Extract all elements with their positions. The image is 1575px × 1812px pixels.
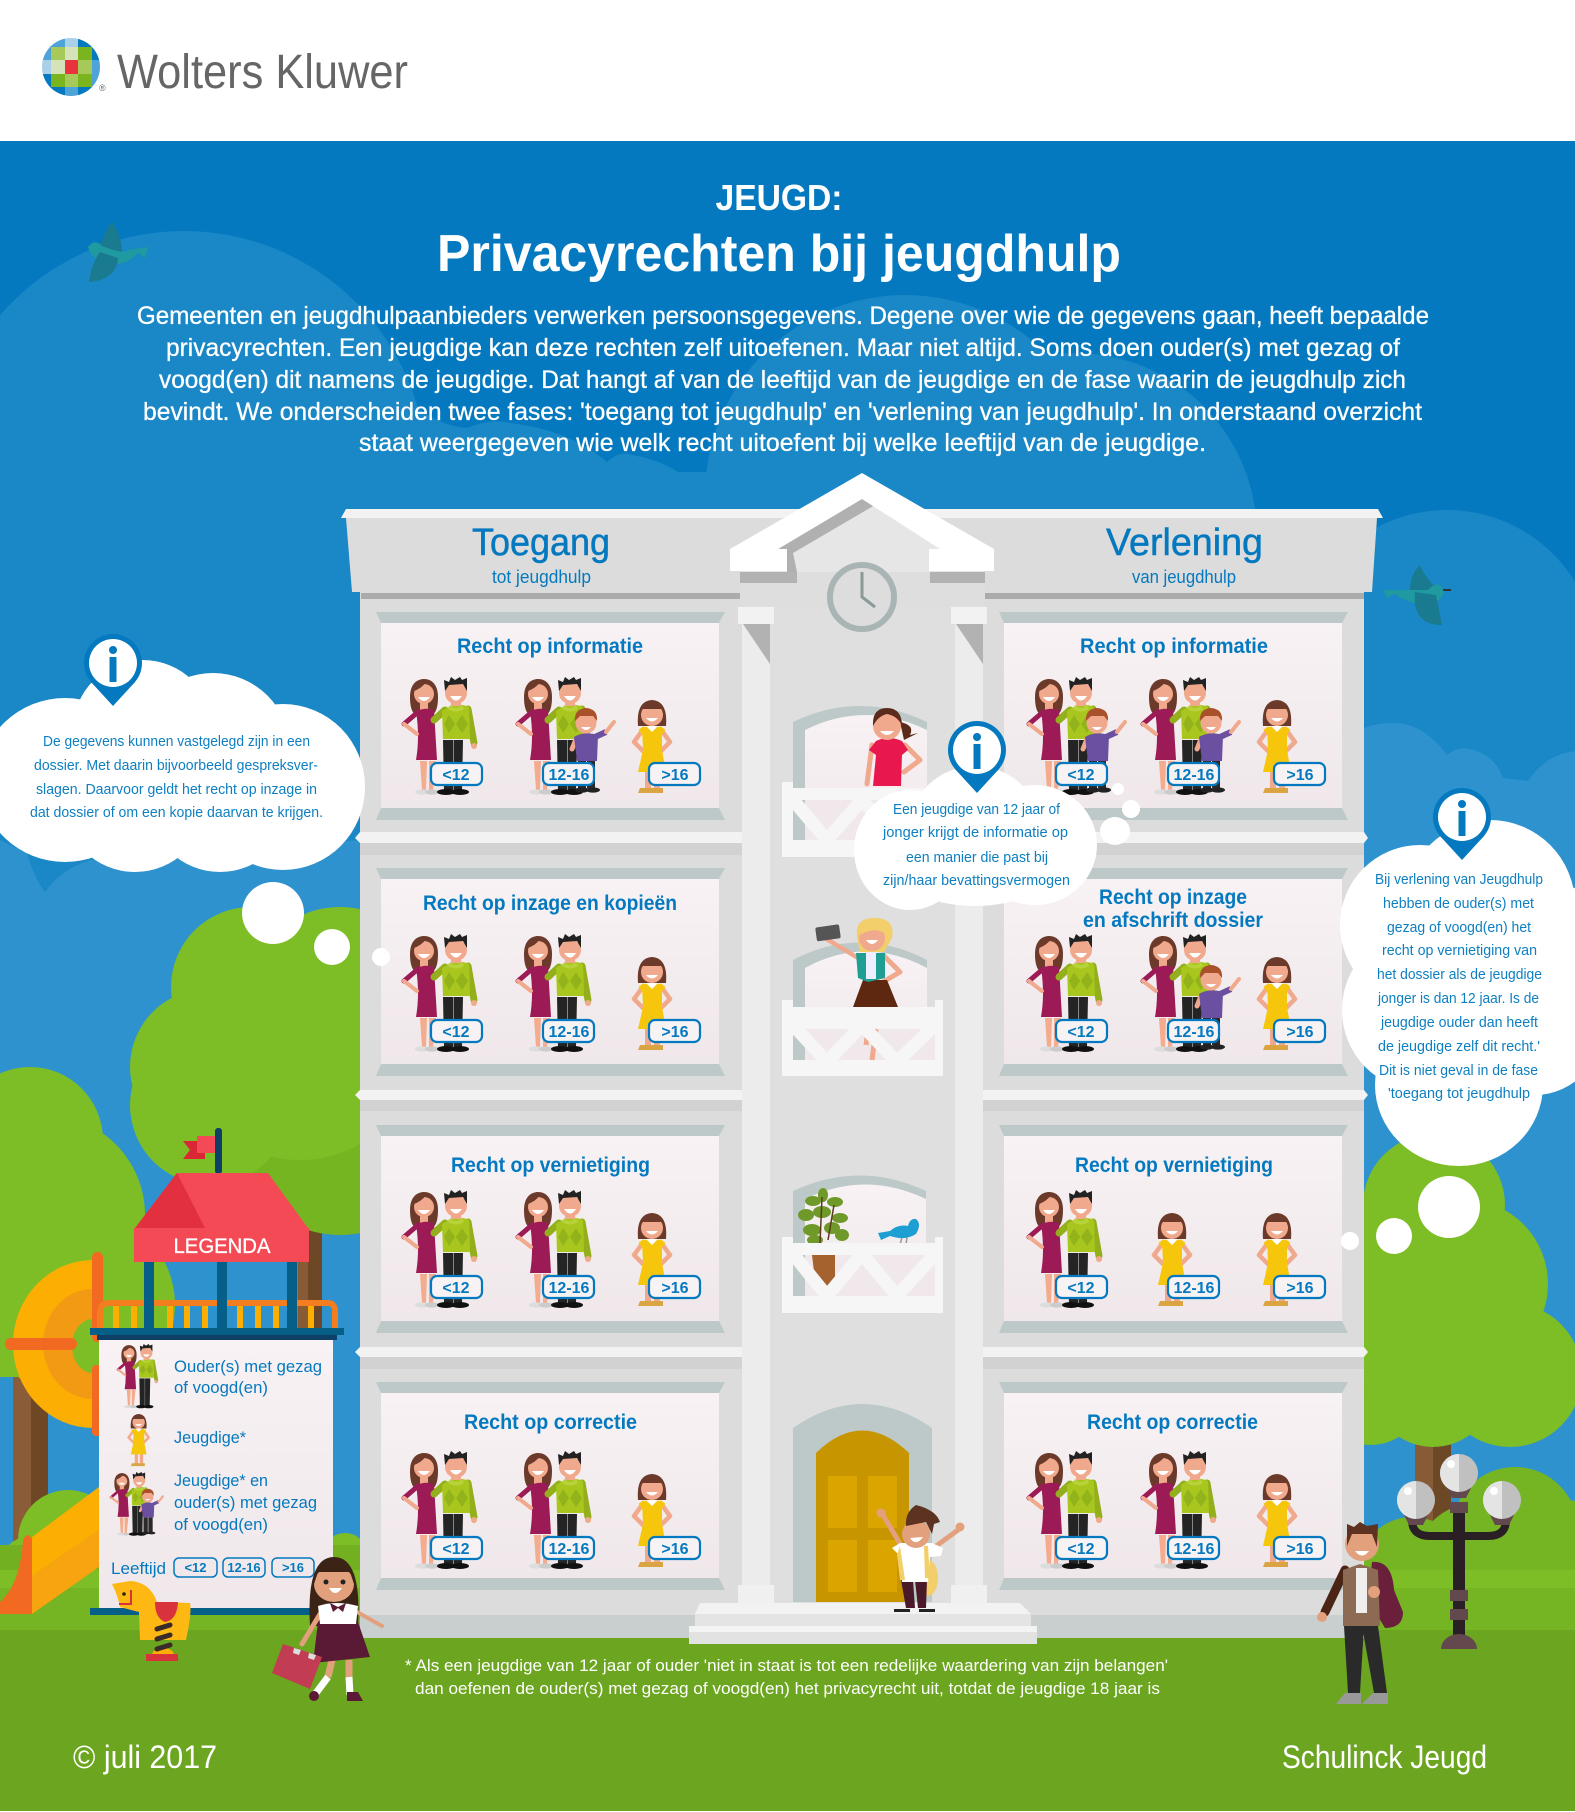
callout: verlening: Bij verlening van Jeugdhulp [1375,871,1543,888]
callout: dossier: dat dossier of om een kopie daarvan te krijgen. [30,804,323,821]
panel: Toegang, recht op correctie: >16 [661,1541,689,1558]
logo: Wolters Kluwer: Wolters Kluwer [117,46,408,99]
intro text: staat weergegeven wie welk recht uitoefent bij welke leeftijd van de jeugdige. [359,429,1206,457]
legend board [90,1335,337,1615]
callout: verlening: Dit is niet geval in de fase [1379,1062,1538,1079]
intro text: Gemeenten en jeugdhulpaanbieders verwerken persoonsgegevens. Degene over wie de gegevens gaan, heeft bepaalde [137,302,1429,330]
panel: Toegang, recht op vernietiging: >16 [661,1280,689,1297]
panel: Toegang, recht op informatie: <12 [442,767,470,784]
callout: verlening: hebben de ouder(s) met [1383,895,1535,912]
panel: Verlening, recht op informatie: >16 [1286,767,1314,784]
legend flag [183,1128,222,1174]
pavilion roof [134,1173,309,1262]
panel: Verlening, recht op vernietiging: Recht op vernietiging [1075,1154,1273,1177]
callout: verlening [1340,788,1575,1254]
footer: date: © juli 2017 [73,1739,217,1775]
panel: Toegang, recht op vernietiging: <12 [442,1280,470,1297]
rocking horse [112,1581,190,1661]
panel: Toegang, recht op vernietiging: Recht op vernietiging [451,1154,650,1177]
intro text: privacyrechten. Een jeugdige kan deze rechten zelf uitoefenen. Maar niet altijd. Soms doen ouder(s) met gezag of [166,334,1400,362]
panel: Verlening, recht op correctie: Recht op correctie [1087,1411,1258,1434]
heading: Verlening: van jeugdhulp [1132,567,1236,587]
legend item: age badges: <12 [184,1560,207,1575]
panel: Toegang, recht op correctie: <12 [442,1541,470,1558]
legend item: youth: Jeugdige* [174,1428,246,1447]
panel: Toegang, recht op correctie: Recht op correctie [464,1411,637,1434]
footer: brand: Schulinck Jeugd [1282,1739,1487,1775]
balcony 2 with selfie woman [782,918,943,1076]
panel: Toegang, recht op informatie [376,612,725,820]
logo: Wolters Kluwer: ® [99,83,106,93]
title: JEUGD: [716,177,842,218]
panel: Verlening, recht op informatie: 12-16 [1174,767,1215,784]
legend item: youth and parents: of voogd(en) [174,1515,268,1534]
panel: Verlening, recht op inzage en afschrift dossier: en afschrift dossier [1083,909,1263,932]
panel: Toegang, recht op correctie [376,1382,725,1590]
callout: verlening: 'toegang tot jeugdhulp [1388,1085,1530,1102]
callout: informatie onder 12 jaar: zijn/haar bevattingsvermogen [883,872,1070,889]
heading: Verlening [1106,522,1263,587]
panel: Verlening, recht op correctie: <12 [1067,1541,1095,1558]
footnote: * Als een jeugdige van 12 jaar of ouder 'niet in staat is tot een redelijke waardering van zijn belangen' [405,1656,1168,1675]
header background [0,0,1575,141]
callout: informatie onder 12 jaar: jonger krijgt de informatie op [882,824,1068,841]
callout: verlening: jeugdige ouder dan heeft [1380,1014,1539,1031]
panel: Toegang, recht op inzage en kopieën [376,868,725,1076]
panel: Toegang, recht op informatie: 12-16 [549,767,590,784]
panel: Verlening, recht op correctie: 12-16 [1174,1541,1215,1558]
panel: Verlening, recht op inzage en afschrift dossier: 12-16 [1174,1024,1215,1041]
panel: Verlening, recht op informatie: <12 [1067,767,1095,784]
panel: Toegang, recht op inzage en kopieën: <12 [442,1024,470,1041]
character: boy at door [876,1505,964,1612]
callout: informatie onder 12 jaar: Een jeugdige van 12 jaar of [893,801,1061,818]
legend item: parents: Ouder(s) met gezag [174,1357,322,1376]
panel: Toegang, recht op inzage en kopieën: >16 [661,1024,689,1041]
panel: Toegang, recht op inzage en kopieën: Recht op inzage en kopieën [423,892,677,915]
callout: verlening: gezag of voogd(en) het [1387,919,1532,936]
legend item: youth and parents: Jeugdige* en [174,1471,268,1490]
steps [689,1603,1037,1644]
panel: Verlening, recht op informatie [999,612,1348,820]
panel: Verlening, recht op inzage en afschrift dossier [999,868,1348,1076]
playground slide [0,1252,103,1614]
footnote: dan oefenen de ouder(s) met gezag of voogd(en) het privacyrecht uit, totdat de jeugdige 18 jaar is [415,1679,1160,1698]
railing [100,1303,335,1328]
callout: verlening: de jeugdige zelf dit recht.' [1378,1038,1540,1055]
callout: verlening: recht op vernietiging van [1382,942,1537,959]
legend item: age badges: >16 [282,1560,304,1575]
heading: Verlening: Verlening [1106,522,1263,564]
panel: Toegang, recht op vernietiging [376,1125,725,1333]
callout: verlening: jonger is dan 12 jaar. Is de [1377,990,1539,1007]
legend item: parents [118,1344,322,1408]
character: schoolgirl [272,1557,382,1701]
legend item: age badges [111,1558,314,1578]
panel: Toegang, recht op vernietiging: 12-16 [549,1280,590,1297]
panel: Verlening, recht op inzage en afschrift dossier: <12 [1067,1024,1095,1041]
legend item: youth [129,1414,246,1466]
callout: dossier: dossier. Met daarin bijvoorbeeld gespreksver- [34,757,318,774]
heading: Toegang: tot jeugdhulp [492,567,591,587]
balcony 3 with plant and bird [782,1176,943,1313]
panel: Toegang, recht op correctie: 12-16 [549,1541,590,1558]
icon: bird left [88,222,148,282]
title [437,177,1121,283]
callout: informatie onder 12 jaar: een manier die past bij [906,849,1048,866]
pavilion posts [90,1262,344,1335]
callout: dossier: De gegevens kunnen vastgelegd zijn in een [43,733,310,750]
footnote [405,1656,1168,1698]
lamp post [1397,1454,1521,1649]
panel: Verlening, recht op informatie: Recht op informatie [1080,635,1268,658]
central tower [730,473,994,1605]
heading: Toegang [472,522,610,587]
callout: dossier [0,634,390,966]
panel: Verlening, recht op correctie [999,1382,1348,1590]
intro text [137,302,1429,457]
heading: Toegang: Toegang [472,522,610,564]
panel: Verlening, recht op vernietiging: 12-16 [1174,1280,1215,1297]
door [793,1404,932,1602]
trees left [0,907,445,1640]
panel: Toegang, recht op inzage en kopieën: 12-16 [549,1024,590,1041]
panel: Verlening, recht op correctie: >16 [1286,1541,1314,1558]
legend item: age badges: Leeftijd [111,1559,166,1578]
intro text: voogd(en) dit namens de jeugdige. Dat hangt af van de leeftijd van de jeugdige en de fase waarin de jeugdhulp zich [159,366,1406,394]
logo: Wolters Kluwer [42,38,408,99]
legend item: youth and parents [111,1471,317,1536]
balcony 1 with woman [782,706,943,857]
pavilion roof: LEGENDA [174,1235,270,1258]
legend item: age badges: 12-16 [227,1560,261,1575]
intro text: bevindt. We onderscheiden twee fases: 'toegang tot jeugdhulp' en 'verlening van jeugdhulp'. In onderstaand overzicht [143,398,1422,426]
panel: Verlening, recht op vernietiging: <12 [1067,1280,1095,1297]
icon: clock [830,565,894,629]
legend [90,1128,344,1615]
legend item: youth and parents: ouder(s) met gezag [174,1493,317,1512]
legend item: parents: of voogd(en) [174,1378,268,1397]
title: Privacyrechten bij jeugdhulp [437,225,1121,283]
panel: Toegang, recht op informatie: >16 [661,767,689,784]
character: boy with backpack [1317,1522,1403,1704]
lawn [0,1545,1575,1811]
callout: informatie onder 12 jaar [854,721,1140,910]
building: Toegang and Verlening wings [341,509,1383,1638]
tree and bushes right [1315,1134,1575,1623]
icon: bird right [1383,565,1451,625]
callout: verlening: het dossier als de jeugdige [1377,966,1542,983]
panel: Verlening, recht op inzage en afschrift dossier: >16 [1286,1024,1314,1041]
panel: Verlening, recht op vernietiging: >16 [1286,1280,1314,1297]
panel: Toegang, recht op informatie: Recht op informatie [457,635,643,658]
panel: Verlening, recht op vernietiging [999,1125,1348,1333]
panel: Verlening, recht op inzage en afschrift dossier: Recht op inzage [1099,886,1247,909]
callout: dossier: slagen. Daarvoor geldt het recht op inzage in [36,781,317,798]
